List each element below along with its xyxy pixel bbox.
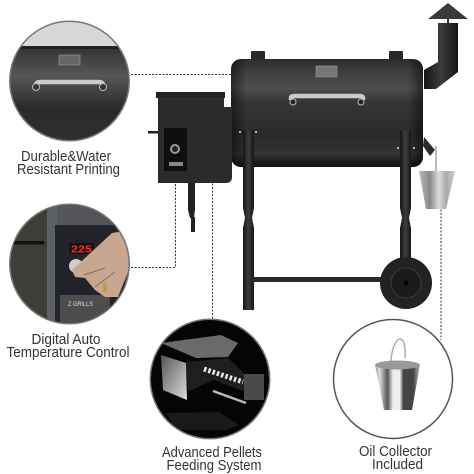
lid handle bbox=[290, 96, 364, 105]
panel: oil collector bbox=[334, 320, 452, 473]
panel: pellet feeding system: Feeding System bbox=[166, 458, 262, 474]
power cord bbox=[188, 183, 195, 218]
panel: digital temperature control bbox=[6, 204, 130, 360]
lid hinges bbox=[251, 51, 265, 60]
lens: bucket close-up bbox=[334, 320, 452, 438]
grill bbox=[148, 3, 468, 310]
lens: control panel close-up: 225 bbox=[71, 244, 92, 256]
hopper bbox=[148, 92, 232, 232]
dashed leader lines bbox=[131, 74, 441, 340]
lens: control panel close-up: Z GRILLS bbox=[68, 302, 93, 308]
chimney bbox=[424, 3, 468, 89]
caption: Advanced Pellets bbox=[162, 445, 262, 461]
mounting bolts bbox=[239, 131, 415, 149]
panel: durable printing: Resistant Printing bbox=[17, 162, 120, 178]
hanging bucket bbox=[419, 137, 455, 209]
control panel bbox=[164, 128, 187, 171]
crossbar bbox=[252, 277, 397, 282]
caption: Durable&Water bbox=[21, 149, 111, 165]
panel: oil collector: Included bbox=[372, 457, 423, 473]
panel: pellet feeding system bbox=[150, 318, 270, 474]
lens: lid close-up bbox=[9, 20, 130, 142]
wheel bbox=[380, 257, 432, 309]
panel: durable printing bbox=[9, 20, 130, 177]
lens: auger close-up bbox=[150, 318, 270, 440]
caption: Digital Auto bbox=[32, 332, 100, 348]
lens: control panel close-up bbox=[9, 204, 130, 324]
barrel body bbox=[231, 59, 423, 167]
legs bbox=[243, 130, 254, 310]
lid logo plate bbox=[316, 66, 337, 77]
panel: digital temperature control: Temperature Control bbox=[6, 345, 130, 361]
caption: Oil Collector bbox=[359, 444, 432, 460]
